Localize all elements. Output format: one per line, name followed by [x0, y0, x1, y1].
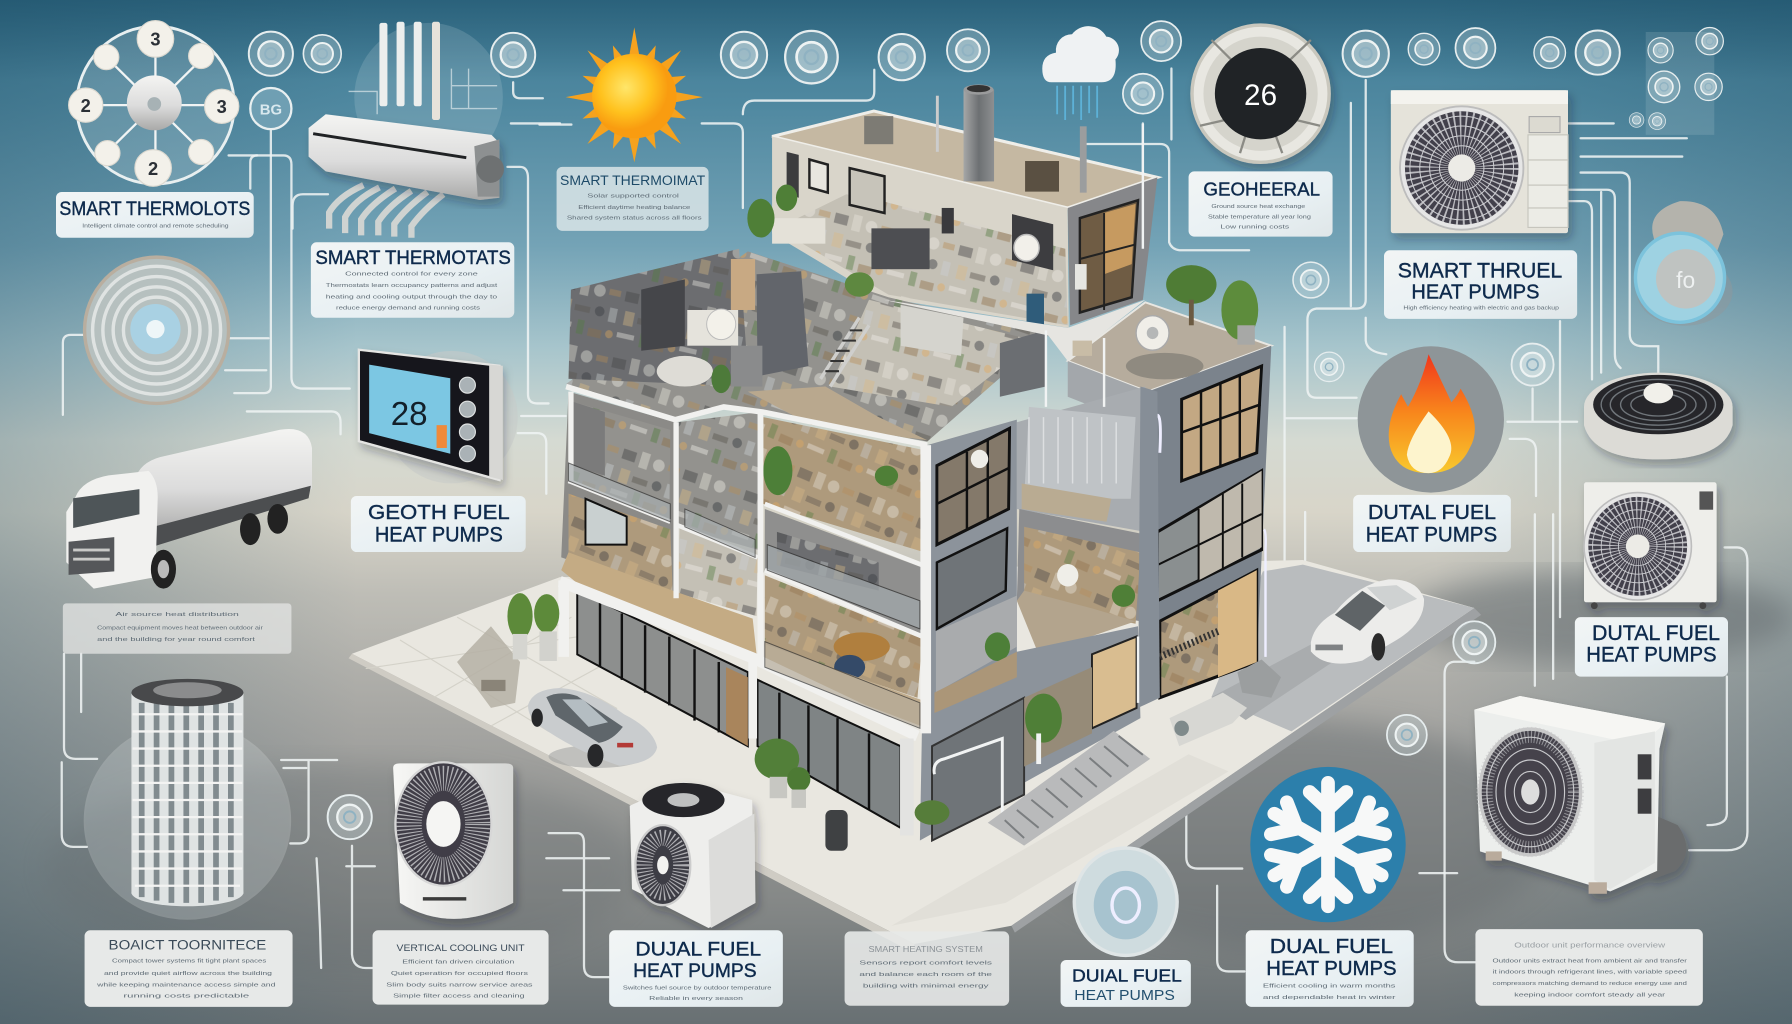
glass balustrades — [569, 463, 920, 728]
label: dutal fuel heat pumps right — [1575, 617, 1728, 677]
label: dutal fuel heat pumps centre — [1353, 495, 1511, 552]
snowflake icon — [1250, 767, 1406, 922]
label: geoheeral — [1189, 171, 1333, 237]
description panel: fan tower: Efficient fan driven circulation — [402, 959, 514, 965]
label: smart thermoimat: Shared system status across all floors — [567, 215, 702, 221]
front plants — [534, 594, 949, 851]
large outdoor unit in perspective — [1474, 696, 1686, 894]
main deck — [566, 249, 1145, 442]
centre cutaway — [1017, 387, 1160, 708]
round fan device — [1584, 373, 1733, 459]
label: smart thermotats: Thermostats learn occupancy patterns and adjust — [326, 283, 498, 289]
icon circles top centre — [721, 21, 1181, 114]
description panel centre: Sensors report comfort levels — [859, 961, 992, 967]
white floor slabs and columns — [560, 387, 927, 835]
indoor air conditioner — [309, 114, 504, 238]
label: smart thermoimat: Efficient daytime heating balance — [578, 205, 690, 211]
small compact outdoor unit — [630, 782, 755, 928]
description panel right: Outdoor units extract heat from ambient air and transfer — [1493, 958, 1687, 964]
large outdoor unit — [1391, 90, 1568, 233]
label: smart thruel heat pumps: HEAT PUMPS — [1411, 280, 1539, 303]
description panel right: keeping indoor comfort steady all year — [1514, 993, 1665, 999]
label: geoheeral: Stable temperature all year long — [1208, 214, 1311, 220]
icon: dial diagram: 2 — [81, 95, 91, 116]
label: duial fuel heat pumps small — [1061, 960, 1191, 1007]
label: dutal fuel heat pumps centre: HEAT PUMPS — [1366, 522, 1497, 547]
label: smart thruel heat pumps: High efficiency heating with electric and gas backup — [1403, 306, 1559, 312]
flame icon — [1358, 346, 1504, 493]
wall thermostat — [359, 350, 518, 483]
label: dujal fuel heat pumps: Switches fuel source by outdoor temperature — [623, 986, 771, 992]
label: smart thermolots: Intelligent climate control and remote scheduling — [82, 223, 229, 229]
roof terrace — [1068, 265, 1271, 427]
icon circles top left: BG — [260, 102, 282, 118]
label: smart thermoimat — [557, 167, 709, 231]
description panel: boaict toornitece: while keeping maintenance access simple and — [96, 982, 275, 988]
left facade floors — [561, 392, 927, 728]
description panel right — [1475, 929, 1703, 1006]
plaza ground — [349, 560, 1481, 953]
label: smart thermotats — [311, 242, 514, 318]
description panel centre: SMART HEATING SYSTEM — [869, 945, 983, 954]
description panel left: and the building for year round comfort — [97, 637, 256, 643]
icon: dial diagram: 2 — [148, 158, 158, 179]
label: dujal fuel heat pumps: Reliable in every season — [649, 996, 743, 1002]
description panel: boaict toornitece: BOAICT TOORNITECE — [109, 938, 266, 953]
description panel: fan tower: Simple filter access and cleaning — [393, 994, 525, 1000]
exterior stairs — [988, 731, 1150, 846]
sun — [566, 27, 703, 162]
label: smart thermolots — [56, 192, 254, 238]
description panel: fan tower: Slim body suits narrow service areas — [386, 982, 533, 988]
icon circles top left — [249, 32, 535, 129]
ground floor glazing — [577, 591, 901, 828]
icon: dial diagram — [69, 21, 239, 186]
cloud with rain — [1042, 26, 1119, 120]
label: dujal fuel heat pumps: DUJAL FUEL — [635, 938, 761, 960]
right tower facade — [1148, 346, 1271, 698]
small icon discs lower right — [328, 621, 1495, 839]
label: dutal fuel heat pumps centre: DUTAL FUEL — [1368, 501, 1496, 524]
label: dutal fuel heat pumps right: DUTAL FUEL — [1592, 620, 1720, 645]
label: geoheeral: Ground source heat exchange — [1211, 204, 1305, 210]
tanker truck — [66, 429, 312, 589]
smart sensor ring: fo — [1676, 267, 1695, 293]
label: duial fuel heat pumps small: HEAT PUMPS — [1074, 988, 1175, 1004]
label: smart thermoimat: SMART THERMOIMAT — [560, 173, 706, 188]
right outdoor unit — [1584, 482, 1717, 609]
description panel right: it indoors through refrigerant lines, with variable speed — [1493, 970, 1687, 976]
description panel: fan tower — [373, 930, 549, 1005]
front corner facade — [920, 420, 1140, 841]
parked silver car — [528, 688, 657, 768]
label: geoth fuel heat pumps — [351, 496, 526, 552]
label: geoheeral: GEOHEERAL — [1203, 178, 1320, 199]
round dial thermostat: 26 — [1244, 79, 1277, 112]
description panel centre: and balance each room of the — [859, 972, 992, 978]
description panel: boaict toornitece: and provide quiet airflow across the building — [104, 971, 272, 977]
upper volume — [747, 96, 1157, 329]
outdoor pump unit — [1170, 659, 1281, 746]
spiral disc — [85, 257, 229, 403]
blueprint backdrop and vertical pipes — [349, 22, 503, 171]
description panel left: Air source heat distribution — [115, 612, 239, 618]
cylinder unit with glass halo — [85, 679, 290, 919]
building risers — [1046, 124, 1143, 703]
label: smart thermotats: Connected control for every zone — [345, 271, 478, 277]
label: smart thermotats: reduce energy demand and running costs — [336, 306, 480, 312]
label: dual fuel heat pumps snowflake: and dependable heat in winter — [1263, 995, 1396, 1001]
label: smart thermotats: heating and cooling output through the day to — [326, 294, 497, 300]
smart sensor ring — [1635, 201, 1733, 326]
description panel: fan tower: Quiet operation for occupied floors — [391, 971, 528, 977]
description panel centre — [845, 931, 1009, 1006]
label: geoheeral: Low running costs — [1221, 225, 1289, 231]
white fan tower — [393, 762, 513, 919]
wall thermostat: 28 — [391, 396, 428, 433]
label: dual fuel heat pumps snowflake: HEAT PUMPS — [1266, 957, 1397, 980]
cutaway building — [457, 84, 1281, 851]
description panel: fan tower: VERTICAL COOLING UNIT — [397, 943, 525, 953]
label: dual fuel heat pumps snowflake — [1246, 930, 1414, 1007]
description panel left: Compact equipment moves heat between outdoor air — [97, 626, 263, 632]
label: dujal fuel heat pumps — [609, 930, 783, 1007]
label: dutal fuel heat pumps right: HEAT PUMPS — [1586, 642, 1717, 667]
label: dual fuel heat pumps snowflake: DUAL FUEL — [1270, 935, 1393, 958]
label: geoth fuel heat pumps: GEOTH FUEL — [368, 501, 510, 524]
label: duial fuel heat pumps small: DUIAL FUEL — [1072, 966, 1182, 986]
description panel left — [63, 603, 291, 654]
icon circles top right — [1293, 27, 1723, 386]
label: smart thermotats: SMART THERMOTATS — [315, 247, 511, 269]
chimney — [964, 84, 994, 181]
label: smart thermolots: SMART THERMOLOTS — [59, 198, 250, 220]
label: dujal fuel heat pumps: HEAT PUMPS — [633, 960, 757, 982]
description panel: boaict toornitece: Compact tower systems fit tight plant spaces — [112, 958, 266, 964]
label: smart thruel heat pumps: SMART THRUEL — [1398, 258, 1562, 283]
icon: dial diagram: 3 — [217, 96, 227, 117]
description panel: boaict toornitece — [85, 930, 293, 1007]
label: geoth fuel heat pumps: HEAT PUMPS — [375, 522, 503, 547]
glass disc — [1074, 848, 1177, 955]
plaza plant debris — [457, 593, 533, 708]
description panel right: compressors matching demand to reduce energy use and — [1493, 981, 1687, 987]
round dial thermostat — [1192, 25, 1329, 162]
icon: dial diagram: 3 — [150, 29, 161, 50]
label: dual fuel heat pumps snowflake: Efficient cooling in warm months — [1263, 983, 1396, 989]
description panel right: Outdoor unit performance overview — [1514, 940, 1666, 949]
label: smart thruel heat pumps — [1384, 250, 1577, 319]
description panel: boaict toornitece: running costs predictable — [123, 994, 249, 1000]
parked white car — [1311, 579, 1424, 664]
description panel centre: building with minimal energy — [863, 983, 989, 989]
label: smart thermoimat: Solar supported control — [587, 194, 679, 200]
